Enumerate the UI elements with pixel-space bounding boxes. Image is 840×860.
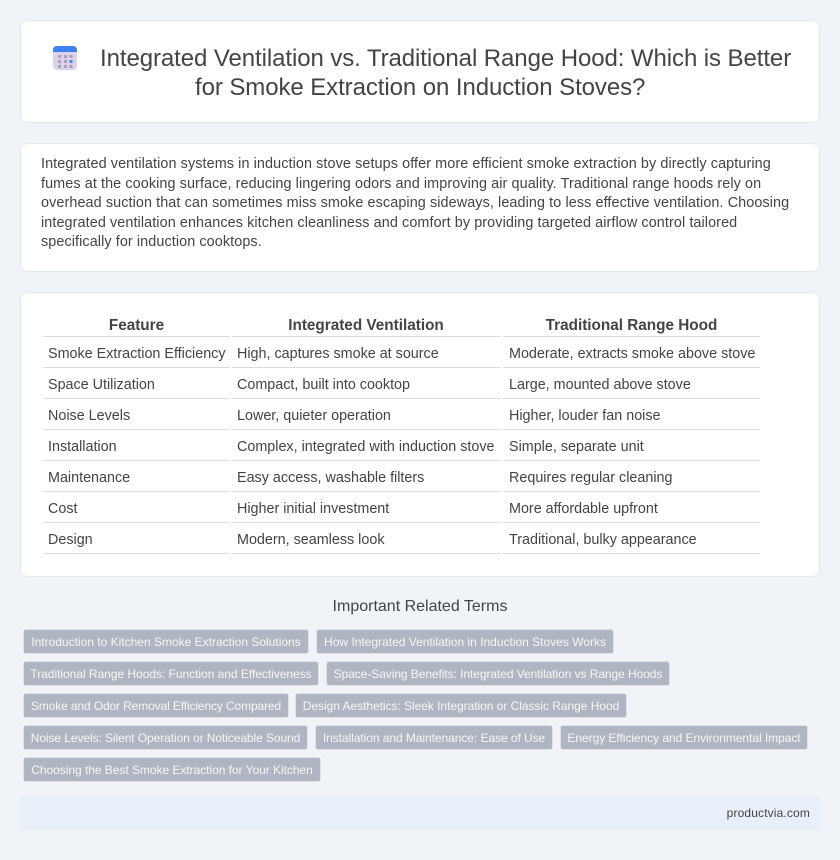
comparison table: Large, mounted above stove	[509, 377, 691, 393]
comparison table: High, captures smoke at source	[237, 346, 439, 362]
panel: comparison table card	[20, 292, 820, 577]
comparison table: Complex, integrated with induction stove	[237, 439, 495, 455]
table header: Feature	[109, 317, 164, 334]
table header	[109, 317, 717, 334]
comparison table: Moderate, extracts smoke above stove	[509, 346, 755, 362]
footer source text: productvia.com	[727, 806, 810, 820]
related term tags: Installation and Maintenance: Ease of Use	[323, 731, 545, 745]
table header: Traditional Range Hood	[546, 317, 717, 334]
table header: Integrated Ventilation	[288, 317, 444, 334]
intro text: overhead suction that can sometimes miss smoke escaping sideways, leading to less effective ventilation. Choosing	[41, 195, 789, 211]
related term tags: Design Aesthetics: Sleek Integration or Classic Range Hood	[303, 699, 619, 713]
comparison table: Modern, seamless look	[237, 532, 384, 548]
related term tags: Choosing the Best Smoke Extraction for Your Kitchen	[31, 763, 313, 777]
related term tags: Smoke and Odor Removal Efficiency Compared	[31, 699, 281, 713]
intro text	[41, 156, 789, 250]
related term tags: Traditional Range Hoods: Function and Effectiveness	[30, 667, 312, 681]
title: Integrated Ventilation vs. Traditional Range Hood: Which is Better	[100, 45, 791, 72]
intro text: specifically for induction cooktops.	[41, 234, 262, 250]
related term tags: Energy Efficiency and Environmental Impact	[567, 731, 801, 745]
intro text: fumes at the cooking surface, reducing lingering odors and improving air quality. Traditional range hoods rely on	[41, 176, 761, 192]
comparison table: Installation	[48, 439, 117, 455]
related term tags: Introduction to Kitchen Smoke Extraction Solutions	[31, 635, 301, 649]
comparison table: Maintenance	[48, 470, 130, 486]
title: for Smoke Extraction on Induction Stoves?	[195, 74, 645, 101]
icon: calendar	[53, 46, 77, 70]
panel: intro text card	[20, 143, 820, 272]
comparison table: Higher initial investment	[237, 501, 389, 517]
related term tags: Space-Saving Benefits: Integrated Ventilation vs Range Hoods	[334, 667, 662, 681]
comparison table: Compact, built into cooktop	[237, 377, 410, 393]
related term tags: How Integrated Ventilation in Induction Stoves Works	[324, 635, 606, 649]
comparison table: More affordable upfront	[509, 501, 658, 517]
intro text: integrated ventilation enhances kitchen cleanliness and comfort by providing targeted airflow control tailored	[41, 215, 737, 231]
related term tags: Noise Levels: Silent Operation or Noticeable Sound	[31, 731, 300, 745]
comparison table: Simple, separate unit	[509, 439, 644, 455]
comparison table: Easy access, washable filters	[237, 470, 424, 486]
footer bar	[20, 796, 820, 830]
intro text: Integrated ventilation systems in induction stove setups offer more efficient smoke extraction by directly capturing	[41, 156, 771, 172]
comparison table: Noise Levels	[48, 408, 130, 424]
comparison table: Higher, louder fan noise	[509, 408, 661, 424]
title	[100, 45, 791, 101]
comparison table: Smoke Extraction Efficiency	[48, 346, 226, 362]
related term tags	[23, 629, 808, 782]
panel: title card	[20, 20, 820, 123]
comparison table: Cost	[48, 501, 78, 517]
comparison table	[43, 317, 760, 554]
heading: important related terms: Important Related Terms	[333, 598, 507, 615]
comparison table: Requires regular cleaning	[509, 470, 672, 486]
comparison table: Space Utilization	[48, 377, 155, 393]
comparison table: Traditional, bulky appearance	[509, 532, 697, 548]
comparison table: Design	[48, 532, 93, 548]
comparison table: Lower, quieter operation	[237, 408, 391, 424]
